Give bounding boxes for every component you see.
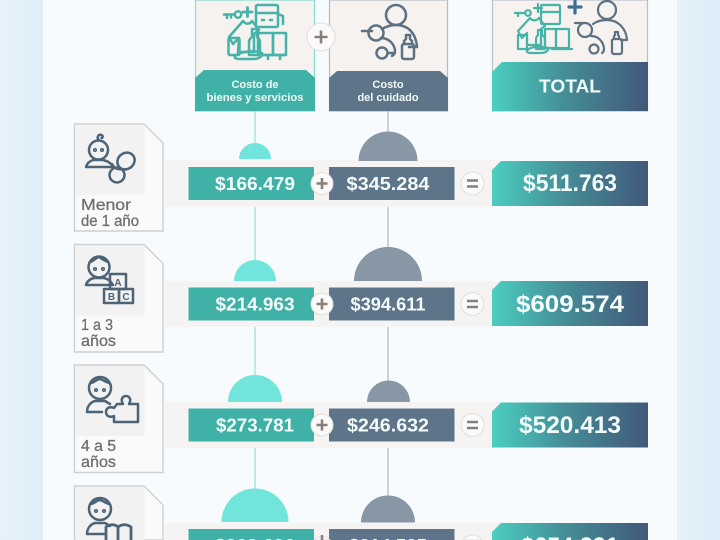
- row: 4 a 5 años: [74, 365, 648, 472]
- row: cuarto grupo de edad (recortado): [74, 486, 648, 540]
- value: bienes: [188, 529, 314, 540]
- background side panel right: [677, 0, 720, 540]
- icon: baby with pacifier: [86, 135, 138, 182]
- value: cuidado: [329, 288, 454, 320]
- icon: plus header: [307, 23, 335, 51]
- card: age group cropped: [74, 486, 163, 540]
- value: total: [492, 402, 648, 448]
- value: bienes: [188, 288, 314, 320]
- icon: caregiver with baby: [362, 5, 417, 59]
- icon: child with book: [87, 498, 131, 540]
- value: bienes: $166.479: [215, 173, 295, 194]
- value: cuidado: $246.632: [347, 414, 429, 436]
- label: 4 a 5 años: 4 a 5: [81, 438, 116, 455]
- dome: bienes: [222, 488, 288, 522]
- icon letters: A B C: A: [114, 278, 122, 289]
- dome: cuidado: [358, 132, 418, 161]
- value: cuidado: $394.611: [350, 294, 426, 314]
- value: bienes: [188, 408, 314, 442]
- label: costo de bienes: bienes y servicios: [206, 92, 304, 104]
- icon: goods and services: [224, 5, 286, 59]
- label: total: [492, 62, 648, 111]
- value: total: [492, 281, 648, 326]
- dome: bienes: [228, 375, 282, 402]
- value: bienes: [188, 167, 314, 200]
- row: menor de 1 año: [74, 124, 648, 231]
- icon letters: A B C: C: [122, 292, 130, 303]
- icon: plus: [311, 414, 333, 436]
- dome: cuidado: [367, 380, 410, 402]
- icon: plus: [314, 535, 330, 540]
- value: total: $520.413: [519, 412, 621, 439]
- label: 4 a 5 años: años: [81, 454, 116, 471]
- card: age menor de 1 año: [74, 124, 163, 231]
- label: 1 a 3 años: años: [81, 333, 116, 350]
- value: bienes: $273.781: [216, 414, 294, 436]
- panel: costo del cuidado: [329, 0, 448, 111]
- label: costo del cuidado: Costo: [372, 79, 404, 91]
- value: cuidado: [329, 167, 454, 200]
- row background bands: [165, 160, 500, 540]
- label: 4 a 5 años: [81, 438, 116, 471]
- label: costo de bienes: [195, 70, 315, 111]
- label: menor de 1 año: [81, 197, 139, 230]
- icon letters: A B C: B: [108, 292, 115, 303]
- label: 1 a 3 años: [81, 317, 116, 350]
- label: menor de 1 año: Menor: [81, 197, 132, 214]
- icon: goods plus care: [515, 1, 627, 54]
- panel: total: [492, 0, 648, 111]
- dome: cuidado: [361, 496, 415, 522]
- value: cuidado: [329, 529, 454, 540]
- label: 1 a 3 años: 1 a 3: [81, 317, 113, 334]
- value: total: [492, 161, 648, 206]
- dome: bienes: [239, 143, 271, 159]
- label: total: TOTAL: [539, 76, 601, 96]
- card: age 1 a 3 años: [74, 244, 163, 352]
- value: total: $609.574: [516, 291, 625, 318]
- value: total: $511.763: [523, 170, 617, 197]
- icon: equals: [461, 292, 484, 316]
- icon: baby with blocks: [86, 256, 133, 303]
- icon: equals: [463, 535, 482, 540]
- dome: cuidado: [354, 247, 422, 281]
- value: bienes: $214.963: [216, 294, 294, 314]
- icon: child with puzzle: [87, 377, 138, 422]
- card: age 4 a 5 años: [74, 365, 163, 472]
- value: cuidado: [329, 408, 454, 442]
- value: total: [492, 523, 648, 540]
- panel: costo de bienes y servicios: [195, 0, 315, 111]
- dome: bienes: [234, 260, 276, 281]
- icon: equals: [461, 172, 484, 195]
- connector lines: [255, 111, 388, 496]
- icon letters: A B C: [108, 278, 130, 303]
- icon: equals: [461, 414, 484, 436]
- row: 1 a 3 años: [74, 244, 648, 352]
- label: costo del cuidado: del cuidado: [357, 92, 419, 104]
- icon: plus: [311, 172, 333, 194]
- value: cuidado: $345.284: [346, 173, 430, 194]
- label: costo de bienes: Costo de: [231, 79, 279, 91]
- label: costo del cuidado: [329, 71, 448, 111]
- label: menor de 1 año: de 1 año: [81, 213, 139, 230]
- icon: plus: [311, 293, 333, 315]
- background side panel left: [0, 0, 43, 540]
